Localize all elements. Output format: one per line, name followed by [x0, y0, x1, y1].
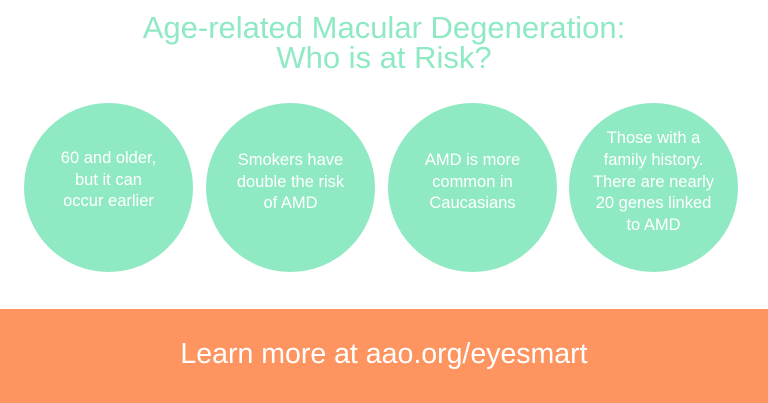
circle: age: but it can — [75, 171, 142, 189]
circle: caucasians — [388, 103, 557, 272]
footer banner: Learn more at aao.org/eyesmart — [180, 338, 588, 370]
circle: age: occur earlier — [63, 192, 154, 210]
circle: smokers: Smokers have — [238, 151, 343, 169]
circle: age — [24, 103, 193, 272]
title: Who is at Risk? — [276, 40, 492, 75]
circle: family history: 20 genes linked — [596, 194, 711, 212]
circle: family history: family history. — [604, 151, 703, 169]
circle: smokers: double the risk — [237, 173, 344, 191]
circle: family history: There are nearly — [593, 173, 714, 191]
circle: caucasians: AMD is more — [425, 151, 520, 169]
circle: smokers: of AMD — [263, 194, 318, 212]
circle: caucasians: Caucasians — [429, 194, 516, 212]
title — [142, 10, 625, 75]
circle: age: 60 and older, — [61, 149, 156, 167]
footer banner — [0, 309, 768, 403]
title: Age-related Macular Degeneration: — [143, 10, 625, 45]
circle: caucasians: common in — [432, 173, 513, 191]
circle: smokers — [206, 103, 375, 272]
circle: family history: Those with a — [607, 129, 700, 147]
circle: family history — [569, 103, 738, 272]
circle: family history: to AMD — [626, 216, 681, 234]
